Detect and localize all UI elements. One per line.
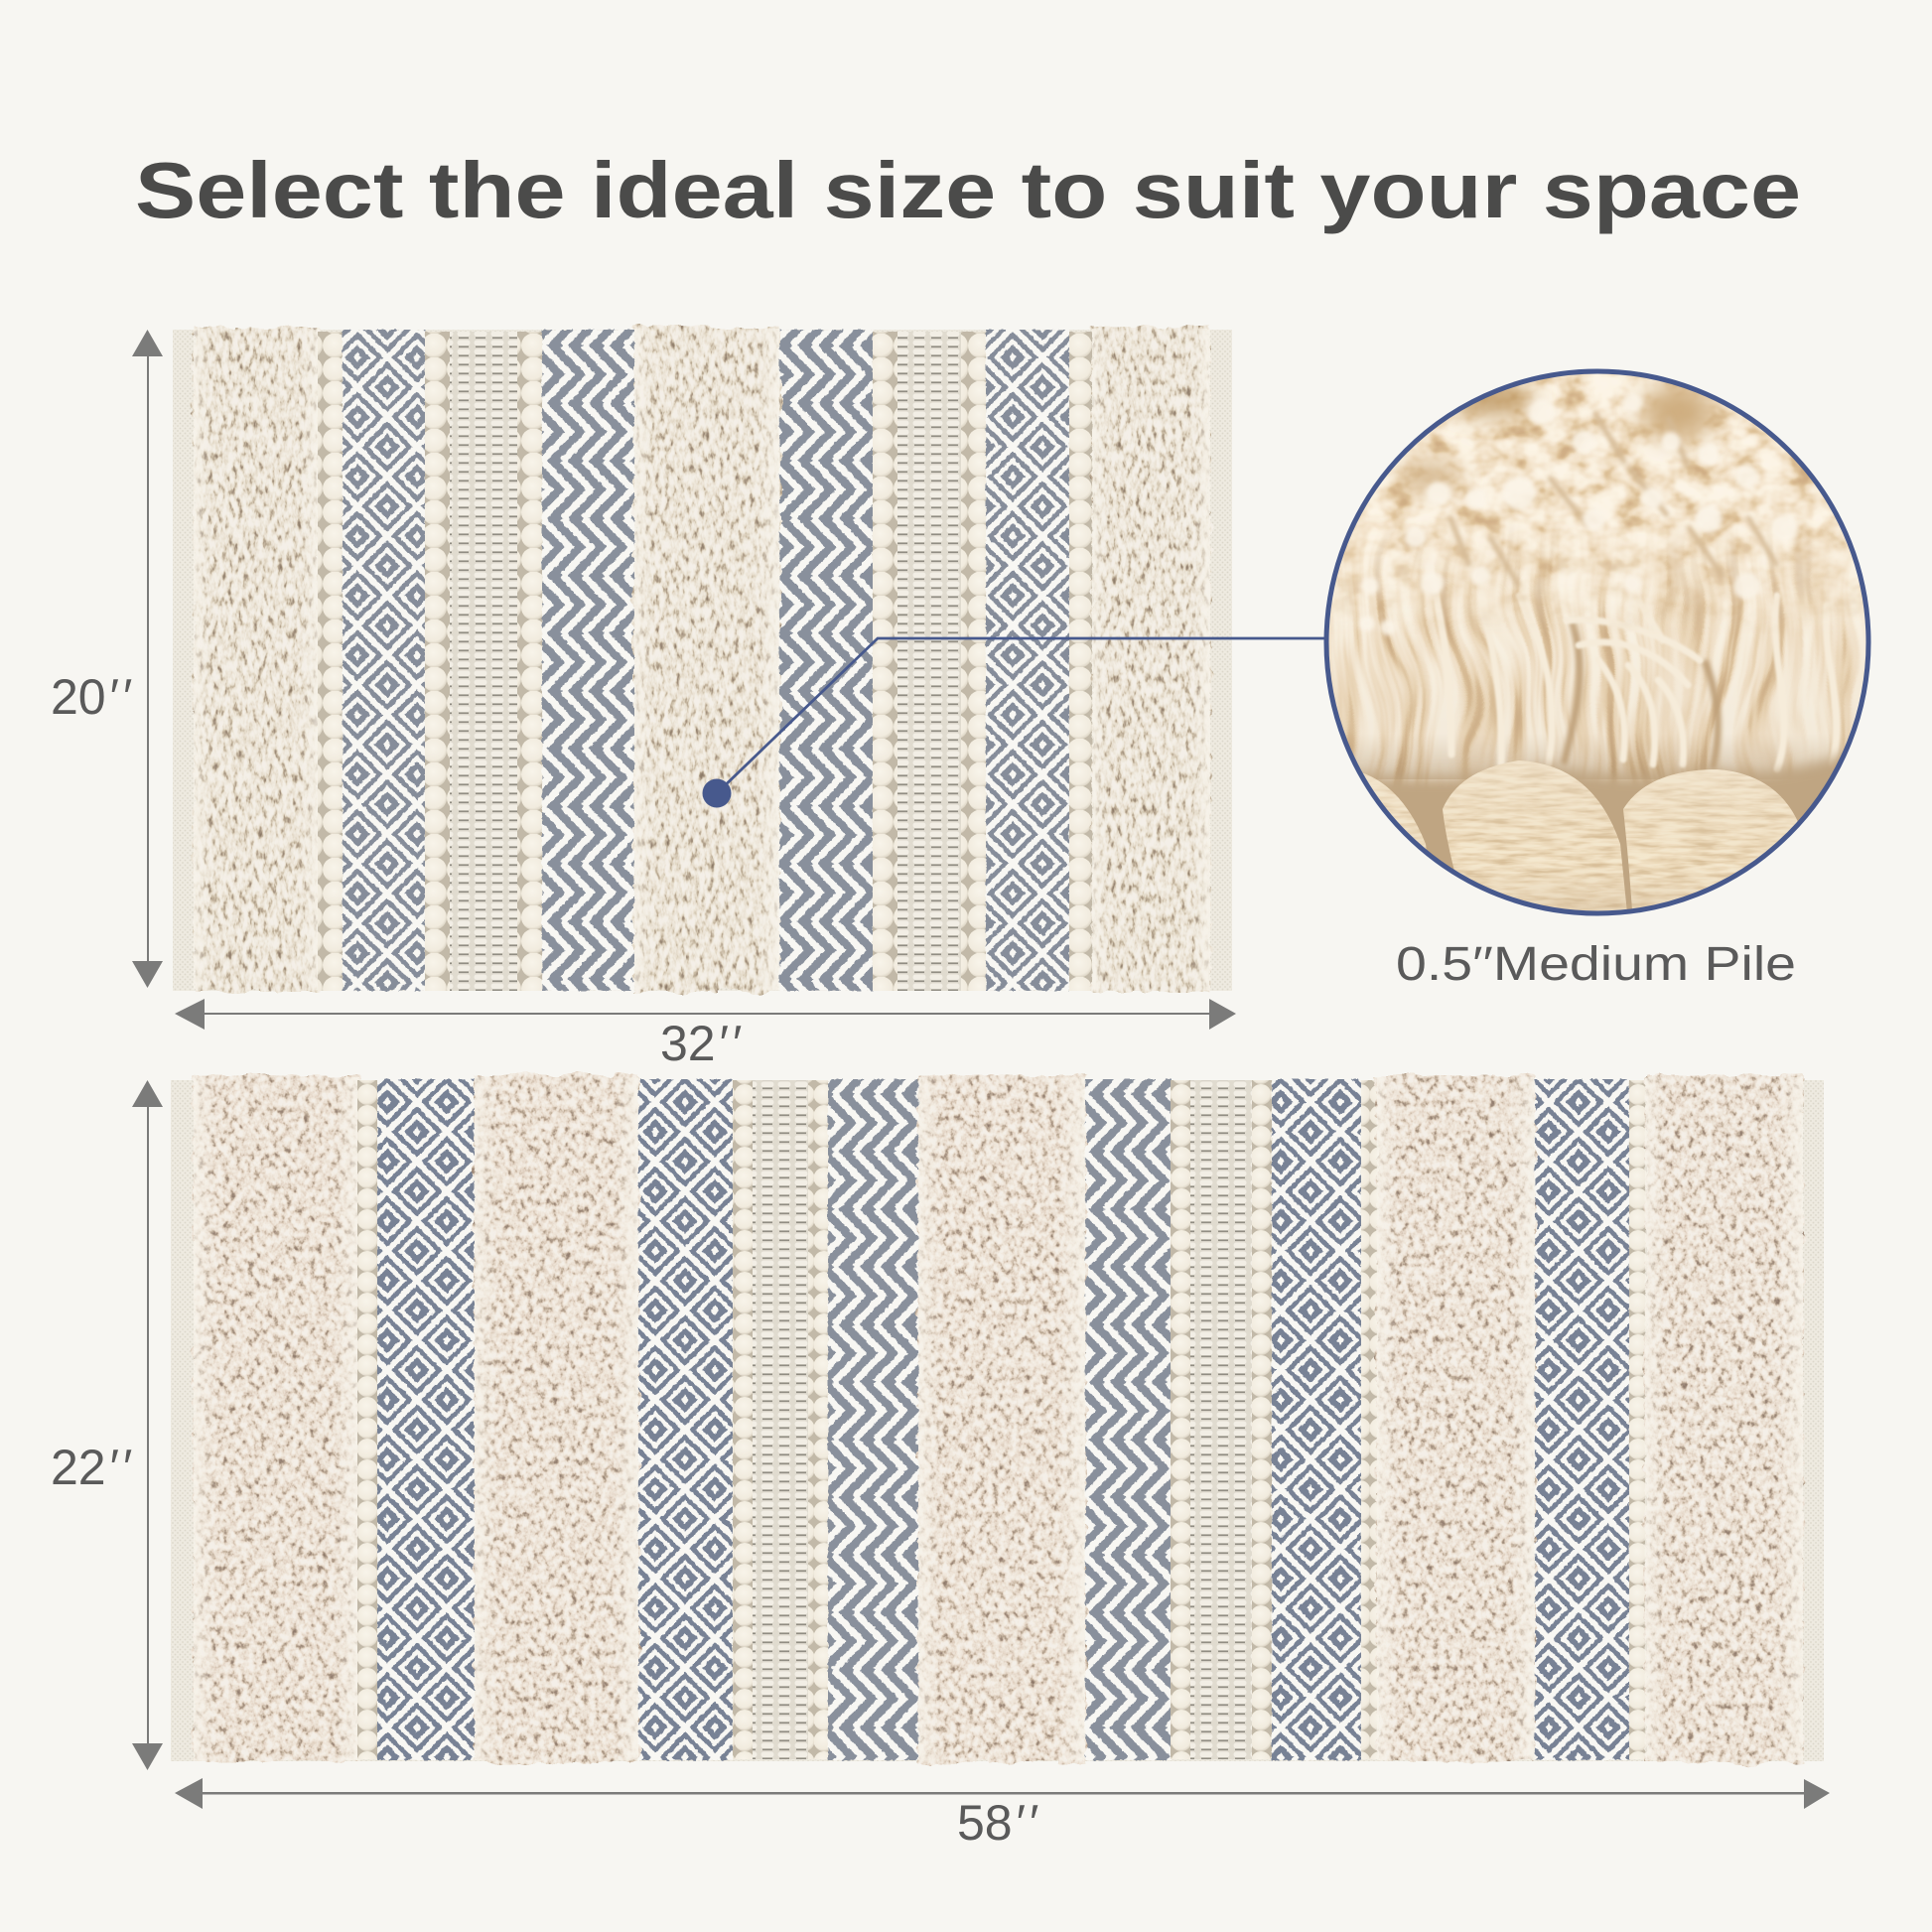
bright yarn tips [1359, 393, 1798, 635]
bead stripe 1 [357, 1080, 377, 1759]
bead stripe 7 [1629, 1080, 1647, 1759]
bead stripe 1 [318, 332, 343, 991]
diamond stripe 4 [1534, 1079, 1629, 1760]
shag stripe 3 [918, 1075, 1085, 1762]
label: 58 inches: 58′′ [957, 1795, 1038, 1851]
shadow notches between tufts [1564, 621, 1718, 769]
bead stripe 3 [517, 332, 542, 991]
base colour [1320, 367, 1876, 919]
diagonal yarn ridges [1449, 412, 1777, 586]
shag stripe 5 [1645, 1075, 1803, 1762]
shadow band under tufts [1361, 749, 1843, 909]
panel: large rug 22 by 58 [171, 1075, 1824, 1762]
label: 22 inches: 22′′ [51, 1440, 132, 1495]
ribbed stripe 1 [753, 1080, 808, 1759]
shag stripe 1 [194, 327, 320, 992]
rug base and selvedge [173, 330, 1232, 991]
zigzag stripe 2 [778, 330, 873, 991]
shag stripe 2 [475, 1075, 638, 1762]
bead stripe 5 [961, 332, 986, 991]
hanging strand texture [1328, 533, 1866, 783]
bead stripe 6 [1069, 332, 1094, 991]
label: 32 inches: 32′′ [660, 1016, 742, 1071]
bead stripe 5 [1252, 1080, 1272, 1759]
callout line and dot [703, 638, 1326, 808]
left yarn ball [1362, 772, 1427, 850]
ribbed stripe 2 [897, 332, 962, 991]
zigzag stripe 1 [542, 330, 634, 991]
label: 20 inches: 20′′ [51, 669, 132, 725]
bead stripe 2 [733, 1080, 753, 1759]
zigzag stripe 1 [828, 1079, 919, 1760]
shag stripe 2 [634, 327, 779, 992]
dimension arrow: large rug width [175, 1778, 1830, 1809]
right yarn ball [1623, 769, 1797, 909]
ribbed stripe 2 [1190, 1080, 1252, 1759]
shag stripe 3 [1092, 327, 1210, 992]
diamond stripe 2 [637, 1079, 733, 1760]
tan shadows at top [1400, 384, 1714, 490]
bead stripe 3 [808, 1080, 828, 1759]
shag stripe 1 [194, 1075, 359, 1762]
close-up lens of pile [1320, 367, 1876, 923]
rug base and selvedge [171, 1080, 1824, 1761]
dimension arrow: large rug height [132, 1080, 163, 1770]
bead stripe 6 [1361, 1080, 1379, 1759]
bead stripe 2 [425, 332, 450, 991]
zigzag stripe 2 [1084, 1079, 1172, 1760]
dimension arrow: small rug width [175, 999, 1236, 1030]
bead stripe 4 [1171, 1080, 1190, 1759]
panel: small rug 20 by 32 [173, 327, 1232, 992]
diamond stripe 1 [343, 330, 425, 991]
label: pile height: 0.5′′Medium Pile [1396, 938, 1796, 991]
yarn photograph approximation [1320, 367, 1876, 923]
diamond stripe 3 [1272, 1079, 1361, 1760]
lens outline [1326, 371, 1868, 913]
diamond stripe 2 [986, 330, 1069, 991]
dimension arrow: small rug height [132, 330, 163, 988]
tuft shading toward the base [1351, 716, 1849, 779]
combed strands [1434, 592, 1841, 772]
ribbed stripe 1 [450, 332, 517, 991]
top blobby yarn field [1331, 373, 1864, 623]
title: Select the ideal size to suit your space [135, 146, 1801, 234]
centre yarn ball [1443, 760, 1628, 923]
bead stripe 4 [873, 332, 897, 991]
diamond stripe 1 [377, 1079, 475, 1760]
shag stripe 4 [1377, 1075, 1535, 1762]
